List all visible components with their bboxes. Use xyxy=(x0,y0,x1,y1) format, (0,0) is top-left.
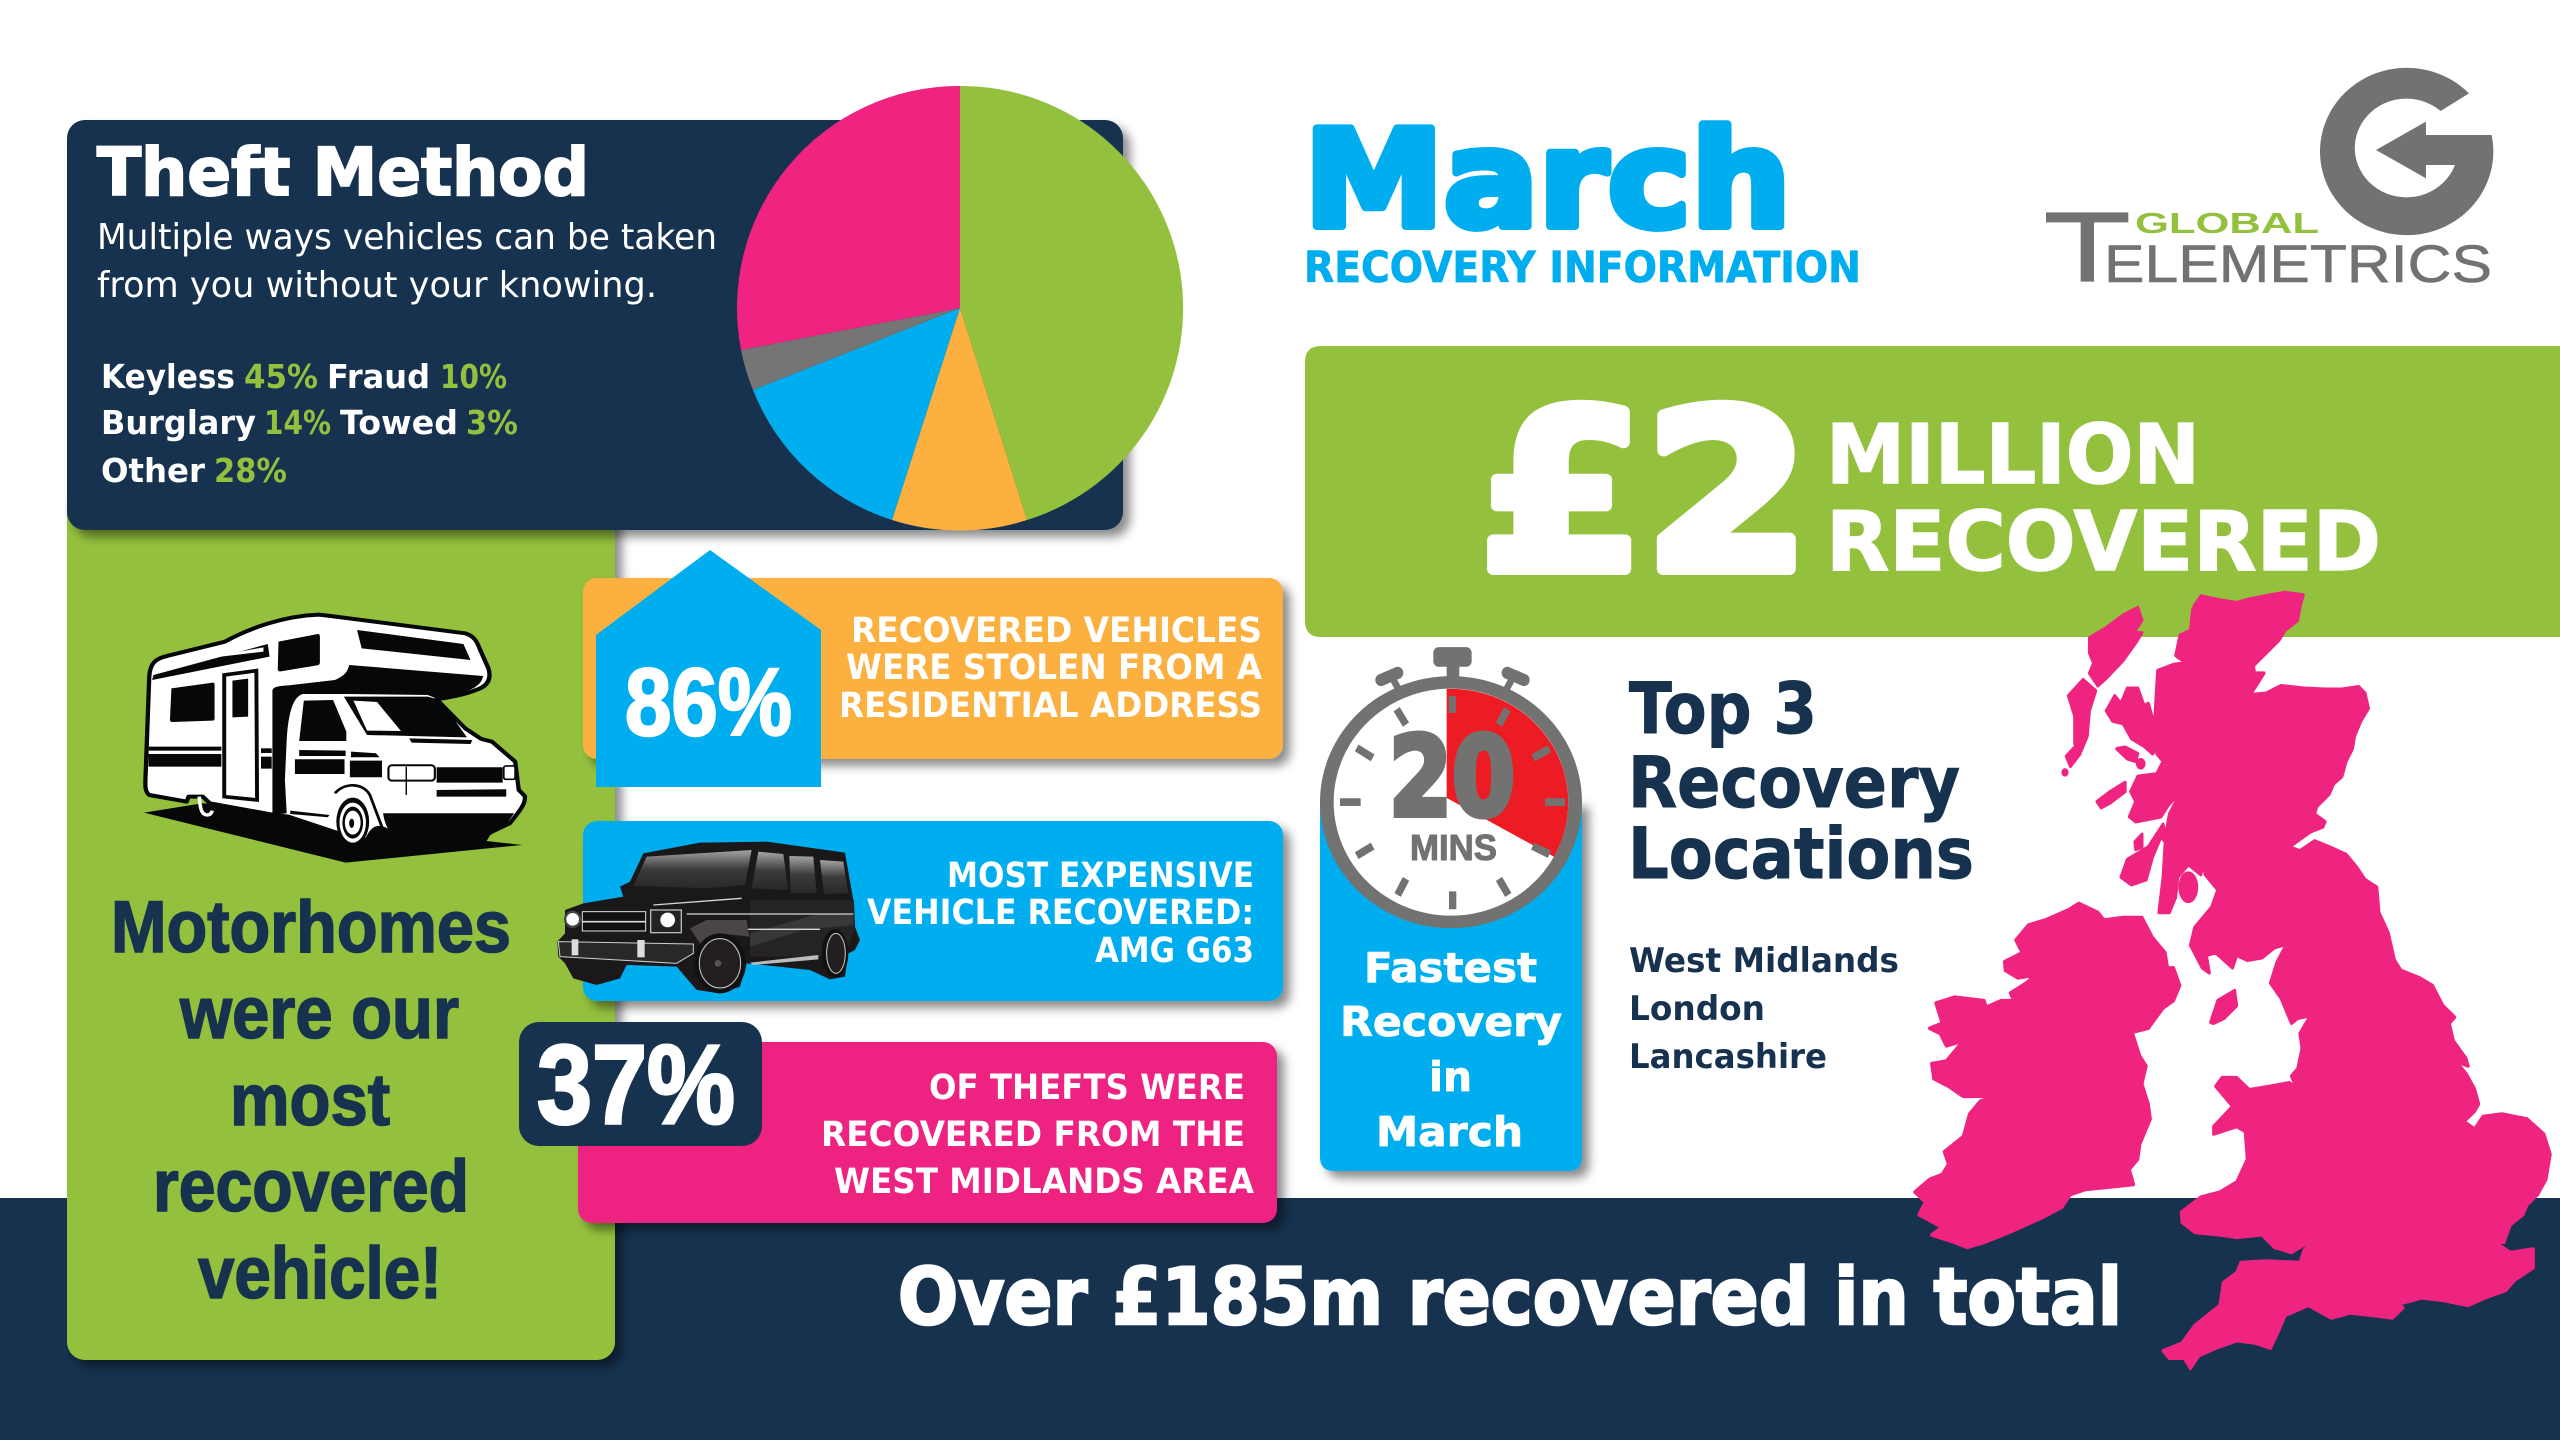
heading: top 3 recovery locations xyxy=(1628,668,1974,895)
panel: fastest recovery xyxy=(1320,647,1582,1171)
text: most recovered vehicle: most xyxy=(230,1060,390,1141)
logo: global telemetrics xyxy=(2046,68,2493,294)
icon: house 86% xyxy=(596,550,821,787)
text: fastest recovery in march: Fastest xyxy=(1364,944,1537,992)
text: most expensive vehicle: AMG G63 xyxy=(1095,931,1254,971)
panel: most expensive vehicle xyxy=(557,821,1283,1001)
title: march: RECOVERY INFORMATION xyxy=(1304,243,1861,293)
list: locations: Lancashire xyxy=(1629,1037,1827,1077)
legend: theft percentages: 28% xyxy=(214,451,287,490)
banner: 2 million recovered: MILLION xyxy=(1826,408,2200,503)
panel: theft method xyxy=(67,86,1183,531)
logo: global telemetrics: GLOBAL xyxy=(2135,208,2319,240)
text: fastest recovery in march xyxy=(1340,944,1562,1156)
text: residential address xyxy=(839,611,1262,726)
text: residential address: RESIDENTIAL ADDRESS xyxy=(839,686,1262,726)
logo: global telemetrics: ELEMETRICS xyxy=(2104,235,2492,294)
banner: 2 million recovered: £2 xyxy=(1479,365,1810,621)
panel: residential address xyxy=(583,550,1283,787)
legend: theft percentages: 10% xyxy=(440,357,507,396)
text: fastest recovery in march: March xyxy=(1376,1108,1523,1156)
panel: motorhomes xyxy=(67,480,615,1360)
heading: top 3 recovery locations: Recovery xyxy=(1628,742,1960,824)
legend: theft percentages: Other xyxy=(101,451,206,490)
text: residential address: WERE STOLEN FROM A xyxy=(846,648,1262,688)
text: theft description: from you without your knowing. xyxy=(97,265,657,306)
text: most recovered vehicle: Motorhomes xyxy=(111,887,511,968)
legend: theft percentages: 3% xyxy=(466,403,518,442)
text: theft description: Multiple ways vehicles can be taken xyxy=(97,217,717,258)
list: locations xyxy=(1629,941,1899,1077)
title: march xyxy=(1304,102,1861,293)
text: residential address: RECOVERED VEHICLES xyxy=(851,611,1262,651)
legend: theft percentages: Burglary xyxy=(101,403,256,442)
title: march: March xyxy=(1304,102,1791,258)
legend: theft percentages: Keyless xyxy=(101,357,235,396)
panel: west midlands xyxy=(519,1022,1277,1223)
text: west midlands: RECOVERED FROM THE xyxy=(821,1115,1245,1155)
text: theft description xyxy=(97,217,717,306)
text: total recovered: Over £185m recovered in total xyxy=(898,1253,2122,1343)
list: locations: London xyxy=(1629,989,1765,1029)
text: west midlands: WEST MIDLANDS AREA xyxy=(834,1162,1254,1202)
text: 20 mins: MINS xyxy=(1410,827,1497,868)
pie chart: theft methods xyxy=(737,86,1183,531)
text: west midlands xyxy=(821,1068,1254,1202)
text: most recovered vehicle: vehicle! xyxy=(198,1233,442,1314)
heading: theft method: Theft Method xyxy=(97,134,589,211)
text: most recovered vehicle: recovered xyxy=(153,1146,469,1227)
icon: motorhome xyxy=(144,615,525,863)
text: fastest recovery in march: in xyxy=(1429,1053,1472,1101)
legend: theft percentages: Fraud xyxy=(327,357,430,396)
text: west midlands: OF THEFTS WERE xyxy=(929,1068,1245,1108)
icon: house 86%: 86% xyxy=(625,649,792,756)
footer band xyxy=(0,1198,2560,1440)
text: 20 mins: 20 xyxy=(1389,713,1515,841)
list: locations: West Midlands xyxy=(1629,941,1899,981)
text: most expensive vehicle xyxy=(867,856,1254,971)
legend: theft percentages: 45% xyxy=(244,357,318,396)
heading: top 3 recovery locations: Locations xyxy=(1628,813,1974,895)
banner: 2 million recovered xyxy=(1305,346,2560,637)
text: most recovered vehicle: were our xyxy=(179,973,459,1054)
icon: black SUV xyxy=(557,842,860,993)
badge: 37%: 37% xyxy=(537,1022,735,1147)
legend: theft percentages: Towed xyxy=(340,403,458,442)
legend: theft percentages xyxy=(101,357,518,490)
legend: theft percentages: 14% xyxy=(264,403,331,442)
text: most expensive vehicle: MOST EXPENSIVE xyxy=(947,856,1254,896)
icon: stopwatch 20 mins xyxy=(1320,647,1582,928)
banner: 2 million recovered: RECOVERED xyxy=(1826,495,2381,590)
heading: top 3 recovery locations: Top 3 xyxy=(1629,668,1817,750)
text: fastest recovery in march: Recovery xyxy=(1340,998,1562,1046)
map: UK and Ireland xyxy=(1915,593,2550,1368)
text: most recovered vehicle xyxy=(111,887,511,1314)
text: most expensive vehicle: VEHICLE RECOVERED: xyxy=(867,893,1254,933)
